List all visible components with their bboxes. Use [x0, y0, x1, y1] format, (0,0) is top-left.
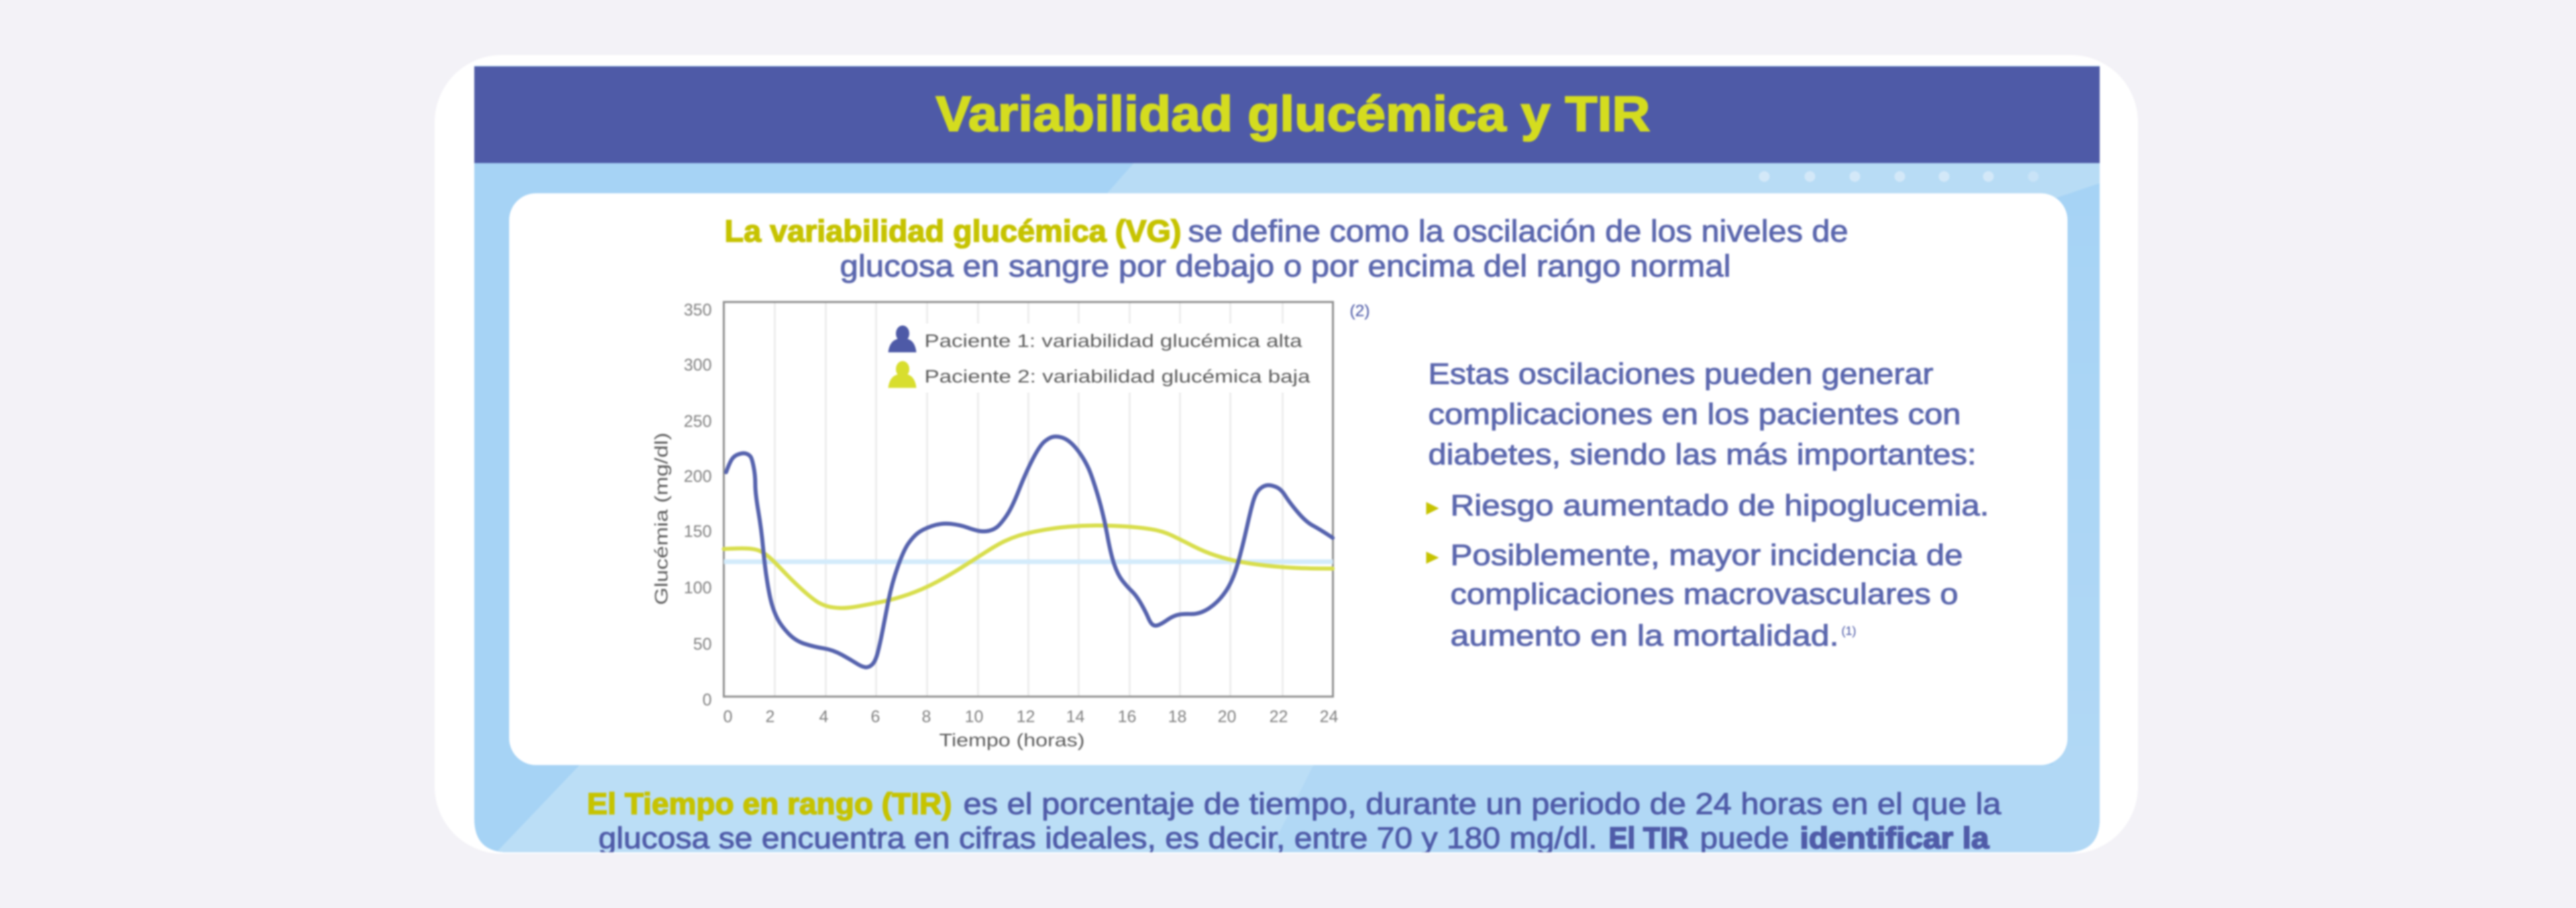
plot frame — [724, 302, 1333, 697]
y axis labels: 200 — [684, 467, 712, 486]
y axis labels: 100 — [684, 578, 712, 597]
x axis labels: 20 — [1218, 707, 1236, 726]
x axis labels: 18 — [1168, 707, 1187, 726]
legend: Paciente 1: variabilidad glucémica alta — [924, 331, 1303, 351]
grid lines — [775, 302, 1283, 697]
definition heading — [724, 213, 1848, 283]
y axis labels: 150 — [684, 522, 712, 541]
x axis labels: 24 — [1320, 707, 1338, 726]
TIR definition — [587, 787, 2002, 855]
y axis labels: 0 — [702, 691, 712, 709]
y axis labels: 50 — [693, 635, 712, 654]
x axis labels: 4 — [819, 707, 828, 726]
title: Variabilidad glucémica y TIR — [936, 86, 1650, 142]
TIR definition: es el porcentaje de tiempo, durante un periodo de 24 horas en el que la — [963, 787, 2002, 821]
text block: complications: Riesgo aumentado de hipoglucemia. — [1450, 489, 1989, 522]
x axis labels: 2 — [765, 707, 775, 726]
TIR definition: El TIR — [1609, 821, 1688, 855]
x axis labels — [723, 707, 1338, 726]
x axis labels: 14 — [1066, 707, 1085, 726]
text block: complications: aumento en la mortalidad. — [1450, 619, 1839, 652]
TIR definition: puede — [1700, 821, 1789, 855]
y axis title: Glucémia (mg/dl) — [651, 432, 672, 605]
panel: light blue background — [474, 64, 2100, 852]
text block: complications: Posiblemente, mayor incidencia de — [1450, 539, 1963, 572]
x axis labels: 8 — [922, 707, 931, 726]
y axis labels: 350 — [684, 301, 712, 319]
definition heading: glucosa en sangre por debajo o por encima del rango normal — [840, 248, 1731, 283]
line chart — [651, 301, 1338, 750]
x axis labels: 10 — [965, 707, 983, 726]
x axis labels: 22 — [1269, 707, 1288, 726]
decorative dots — [1759, 171, 2039, 182]
panel: white content — [509, 193, 2068, 765]
chart reference: (2) — [1350, 302, 1370, 320]
x axis labels: 12 — [1016, 707, 1035, 726]
x axis title: Tiempo (horas) — [939, 730, 1085, 750]
x axis labels: 0 — [723, 707, 733, 726]
TIR definition: identificar la — [1800, 821, 1990, 855]
text block: complications: Estas oscilaciones pueden generar — [1428, 358, 1933, 391]
curve: patient 1 — [726, 437, 1333, 667]
x axis labels: 16 — [1118, 707, 1136, 726]
x axis labels: 6 — [871, 707, 880, 726]
y axis labels — [684, 301, 712, 709]
legend — [880, 323, 1322, 393]
TIR definition: El Tiempo en rango (TIR) — [587, 787, 952, 821]
icon: bullet 2 — [1426, 552, 1439, 564]
text block: complications: diabetes, siendo las más importantes: — [1428, 438, 1976, 471]
TIR definition: glucosa se encuentra en cifras ideales, es decir, entre 70 y 180 mg/dl. — [598, 821, 1597, 855]
definition heading: se define como la oscilación de los niveles de — [1188, 213, 1848, 248]
icon: bullet 1 — [1426, 502, 1439, 515]
white card — [435, 55, 2138, 854]
target line — [724, 560, 1333, 564]
text block: complications: complicaciones macrovasculares o — [1450, 578, 1958, 611]
icon: patient 1 — [888, 325, 916, 352]
icon: patient 2 — [888, 361, 916, 388]
legend: Paciente 2: variabilidad glucémica baja — [924, 366, 1311, 387]
infographic — [435, 55, 2137, 854]
header band — [474, 66, 2100, 163]
definition heading: La variabilidad glucémica (VG) — [724, 213, 1181, 248]
text block: complications: complicaciones en los pacientes con — [1428, 398, 1961, 431]
y axis labels: 250 — [684, 412, 712, 431]
curve: patient 2 — [724, 525, 1333, 608]
text block: complications: (1) — [1841, 624, 1856, 638]
y axis labels: 300 — [684, 356, 712, 374]
text block: complications — [1426, 358, 1989, 652]
